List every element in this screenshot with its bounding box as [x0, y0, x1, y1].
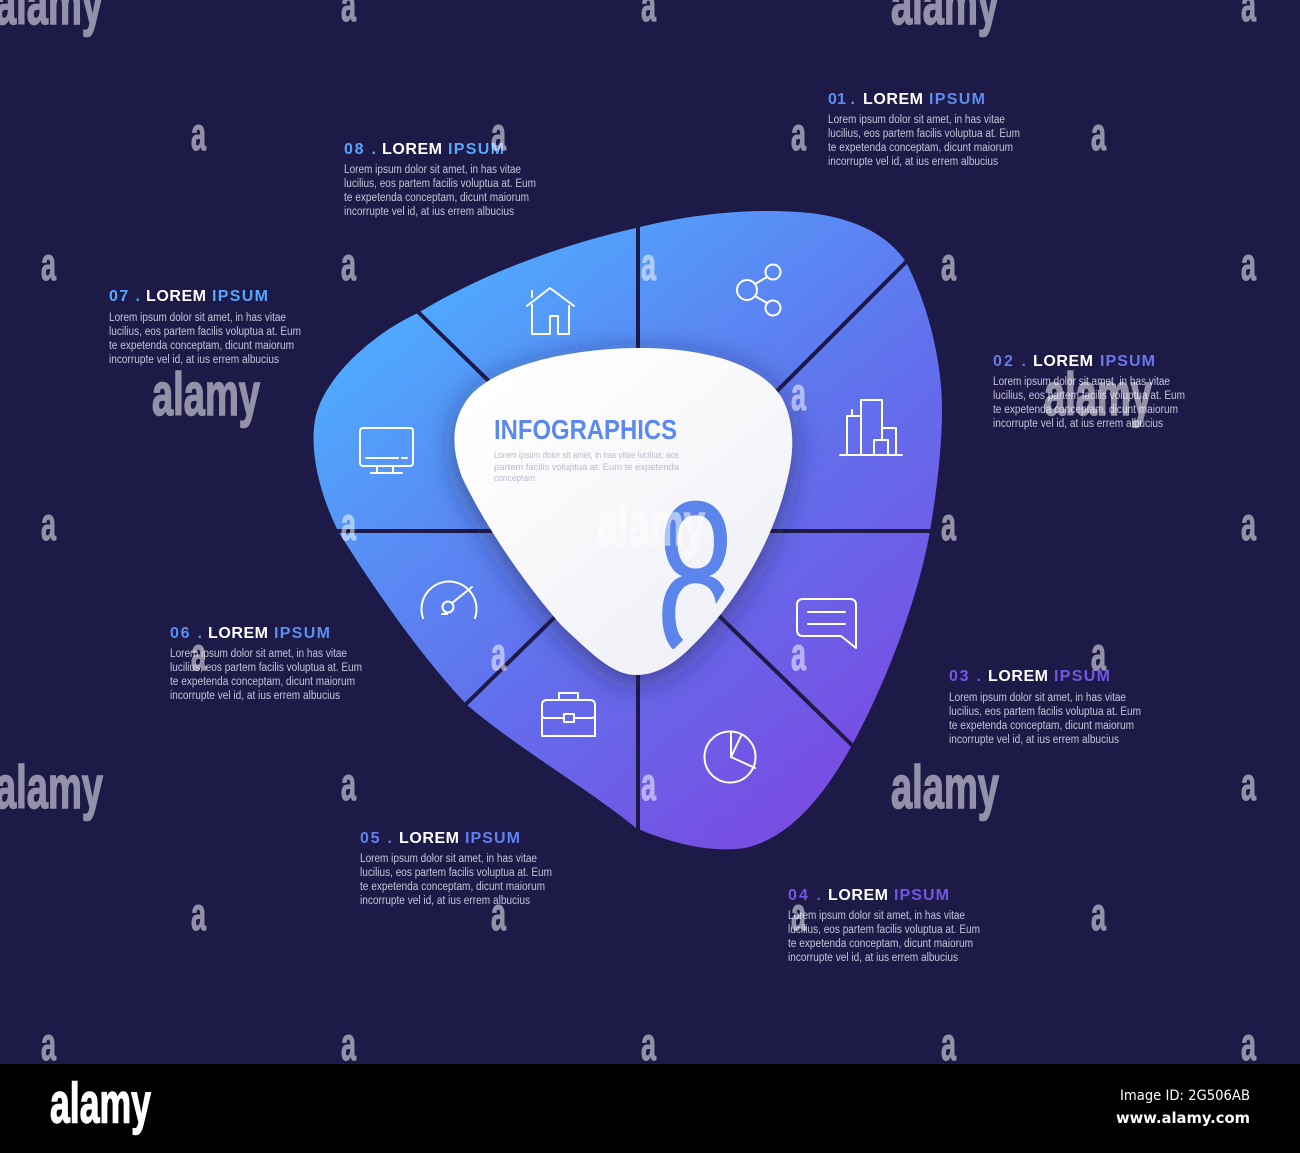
watermarks: a: [41, 1018, 56, 1070]
watermarks: a: [491, 888, 506, 940]
text 06: Lorem ipsum dolor sit amet, in has vitae: [170, 648, 347, 660]
watermarks: alamy: [0, 754, 103, 821]
text 04: [788, 910, 980, 964]
step 02: [993, 353, 1185, 430]
heading 08: 08 .: [344, 141, 376, 158]
icon: buildings: [840, 400, 902, 455]
heading 02: IPSUM: [1100, 353, 1155, 370]
centre panel: [454, 348, 792, 705]
footer logo: alamy: [50, 1072, 151, 1136]
step 06: [170, 625, 362, 702]
big number 8: 8: [656, 455, 736, 705]
watermarks: a: [791, 628, 806, 680]
watermarks: a: [791, 108, 806, 160]
text 06: [170, 648, 362, 702]
heading 01: 01 .: [828, 91, 855, 108]
text 07: incorrupte vel id, at ius errem albucius: [109, 354, 279, 366]
step 03: [949, 668, 1141, 746]
heading 05: [360, 830, 520, 847]
watermarks: a: [791, 888, 806, 940]
text 05: [360, 853, 552, 907]
text 06: te expetenda conceptam, dicunt maiorum: [170, 676, 355, 688]
heading 06: IPSUM: [274, 625, 330, 642]
watermarks: alamy: [891, 754, 999, 821]
watermarks: a: [341, 238, 356, 290]
heading 06: 06 .: [170, 625, 202, 642]
watermarks: a: [1241, 758, 1256, 810]
watermarks: a: [341, 498, 356, 550]
icon: share: [737, 264, 780, 316]
heading 02: LOREM: [1033, 353, 1093, 370]
watermarks: a: [41, 498, 56, 550]
watermarks: a: [341, 1018, 356, 1070]
heading 04: [788, 887, 949, 904]
image id: Image ID: 2G506AB: [1120, 1088, 1250, 1104]
text 08: incorrupte vel id, at ius errem albucius: [344, 206, 514, 218]
centre text: Lorem ipsum dolor sit amet, in has vitae lucilius, eos: [494, 450, 679, 461]
text 05: lucilius, eos partem facilis voluptua at. Eum: [360, 867, 552, 879]
text 04: Lorem ipsum dolor sit amet, in has vitae: [788, 910, 965, 922]
text 07: Lorem ipsum dolor sit amet, in has vitae: [109, 312, 286, 324]
text 02: Lorem ipsum dolor sit amet, in has vitae: [993, 376, 1170, 388]
centre text: conceptam: [494, 473, 535, 484]
watermarks: alamy: [597, 491, 705, 558]
step 08: [344, 141, 536, 218]
text 02: lucilius, eos partem facilis voluptua at. Eum: [993, 390, 1185, 402]
heading 01: IPSUM: [929, 91, 985, 108]
text 03: te expetenda conceptam, dicunt maiorum: [949, 720, 1134, 732]
icon: gauge: [421, 582, 476, 618]
heading 01: LOREM: [863, 91, 923, 108]
heading 03: LOREM: [988, 668, 1048, 685]
text 08: Lorem ipsum dolor sit amet, in has vitae: [344, 164, 521, 176]
text 01: Lorem ipsum dolor sit amet, in has vitae: [828, 114, 1005, 126]
heading 05: LOREM: [399, 830, 459, 847]
heading 06: [170, 625, 330, 642]
watermarks: a: [491, 628, 506, 680]
heading 02: 02 .: [993, 353, 1026, 370]
watermarks: a: [1091, 888, 1106, 940]
heading 03: IPSUM: [1054, 668, 1110, 685]
text 08: te expetenda conceptam, dicunt maiorum: [344, 192, 529, 204]
watermarks: a: [191, 628, 206, 680]
heading 07: LOREM: [146, 288, 206, 305]
text 07: lucilius, eos partem facilis voluptua at. Eum: [109, 326, 301, 338]
heading 07: IPSUM: [212, 288, 268, 305]
heading 04: IPSUM: [894, 887, 949, 904]
watermarks: a: [1241, 498, 1256, 550]
text 04: te expetenda conceptam, dicunt maiorum: [788, 938, 973, 950]
text 06: lucilius, eos partem facilis voluptua at. Eum: [170, 662, 362, 674]
watermarks: a: [941, 1018, 956, 1070]
text 03: Lorem ipsum dolor sit amet, in has vitae: [949, 692, 1126, 704]
centre text: partem facilis voluptua at. Eum te expetenda: [494, 462, 680, 473]
watermarks: a: [941, 498, 956, 550]
text 04: lucilius, eos partem facilis voluptua at. Eum: [788, 924, 980, 936]
icon: chat bubble: [797, 599, 856, 648]
heading 08: LOREM: [382, 141, 442, 158]
text 08: lucilius, eos partem facilis voluptua at. Eum: [344, 178, 536, 190]
icon: briefcase: [542, 693, 595, 736]
step 01: [828, 91, 1020, 168]
heading 04: LOREM: [828, 887, 888, 904]
step 05: [360, 830, 552, 907]
heading 03: 03 .: [949, 668, 981, 685]
watermarks: alamy: [1044, 361, 1152, 428]
outer segmented shape: [314, 211, 942, 849]
text 03: lucilius, eos partem facilis voluptua at. Eum: [949, 706, 1141, 718]
text 02: te expetenda conceptam, dicunt maiorum: [993, 404, 1178, 416]
watermarks: alamy: [152, 361, 260, 428]
text 03: [949, 692, 1141, 746]
watermarks: a: [341, 758, 356, 810]
step 04: [788, 887, 980, 964]
watermarks: a: [641, 1018, 656, 1070]
heading 08: [344, 141, 504, 158]
heading 07: 07 .: [109, 288, 140, 305]
segment dividers: [330, 222, 936, 835]
chart: eight-segment rounded shape: [314, 211, 942, 849]
text 07: [109, 312, 301, 366]
text 05: incorrupte vel id, at ius errem albucius: [360, 895, 530, 907]
text 01: te expetenda conceptam, dicunt maiorum: [828, 142, 1013, 154]
text 01: incorrupte vel id, at ius errem albucius: [828, 156, 998, 168]
text 04: incorrupte vel id, at ius errem albucius: [788, 952, 958, 964]
watermarks: a: [1241, 238, 1256, 290]
website: www.alamy.com: [1116, 1109, 1250, 1127]
icon: monitor: [360, 428, 413, 473]
text 05: te expetenda conceptam, dicunt maiorum: [360, 881, 545, 893]
watermarks: a: [1241, 1018, 1256, 1070]
text 07: te expetenda conceptam, dicunt maiorum: [109, 340, 294, 352]
centre title: INFOGRAPHICS: [494, 414, 677, 445]
heading 05: IPSUM: [465, 830, 520, 847]
heading 04: 04 .: [788, 887, 821, 904]
text 08: [344, 164, 536, 218]
watermarks: a: [641, 238, 656, 290]
step 07: [109, 288, 301, 366]
watermarks: a: [491, 108, 506, 160]
footer bar: [0, 1064, 1300, 1153]
text 05: Lorem ipsum dolor sit amet, in has vitae: [360, 853, 537, 865]
watermarks: a: [191, 888, 206, 940]
watermarks: a: [1091, 628, 1106, 680]
text 03: incorrupte vel id, at ius errem albucius: [949, 734, 1119, 746]
watermarks: a: [41, 238, 56, 290]
heading 07: [109, 288, 268, 305]
watermarks: a: [191, 108, 206, 160]
text 02: [993, 376, 1185, 430]
heading 03: [949, 668, 1110, 685]
text 01: lucilius, eos partem facilis voluptua at. Eum: [828, 128, 1020, 140]
centre text: [494, 450, 680, 484]
heading 02: [993, 353, 1155, 370]
centre white shape: [454, 348, 792, 675]
heading 08: IPSUM: [448, 141, 504, 158]
heading 05: 05 .: [360, 830, 392, 847]
text 02: incorrupte vel id, at ius errem albucius: [993, 418, 1163, 430]
watermarks: a: [641, 758, 656, 810]
text 06: incorrupte vel id, at ius errem albucius: [170, 690, 340, 702]
heading 06: LOREM: [208, 625, 268, 642]
watermarks: a: [941, 238, 956, 290]
text 01: [828, 114, 1020, 168]
watermarks: a: [791, 368, 806, 420]
heading 01: [828, 91, 985, 108]
icon: pie chart: [704, 732, 756, 782]
icon: house: [527, 288, 574, 334]
watermarks: a: [1091, 108, 1106, 160]
